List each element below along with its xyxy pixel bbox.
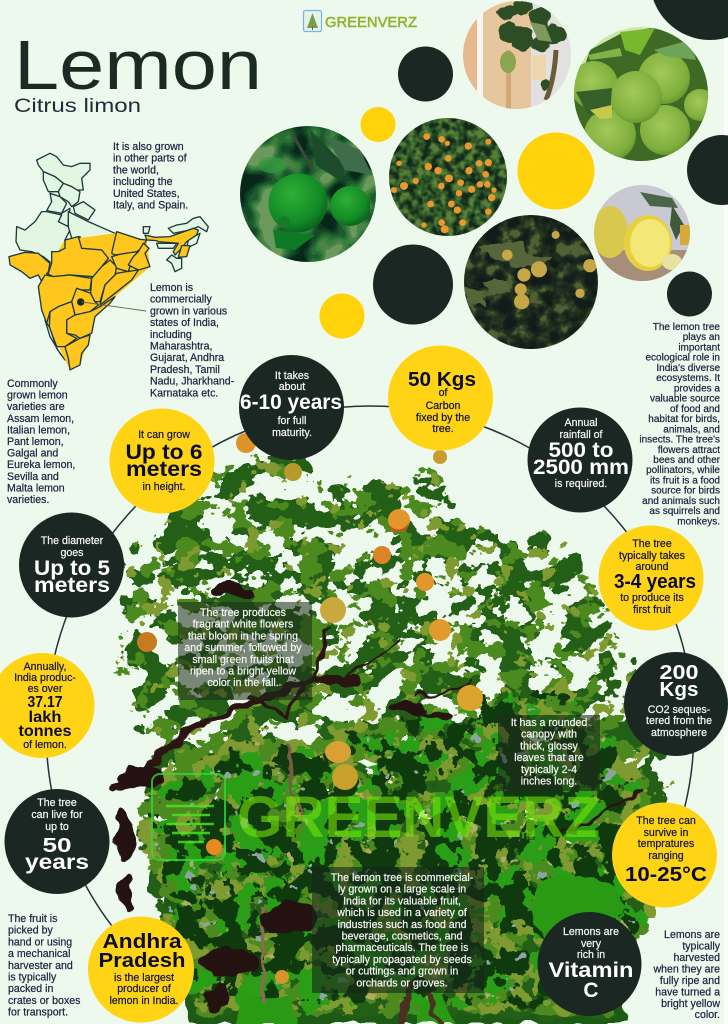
fact: rainfall: is required. bbox=[555, 478, 607, 490]
fact: temperature range: The tree can bbox=[636, 815, 696, 827]
fact: maturity: maturity. bbox=[272, 427, 312, 439]
panel: canopy note: inches long. bbox=[521, 776, 577, 788]
fact: diameter: goes bbox=[61, 547, 83, 559]
fact: annual production: of lemon. bbox=[23, 739, 67, 751]
text: ecological role: India's diverse bbox=[656, 363, 720, 374]
fact: CO2 sequestered: CO2 seques- bbox=[648, 704, 711, 716]
text: ecological role: valuable source bbox=[650, 394, 720, 405]
illustration: lemon tree bbox=[104, 433, 680, 1024]
fact: first fruit bbox=[598, 526, 704, 630]
photo: potted lemon plant bbox=[463, 0, 572, 110]
watermark: Greenverz: GREENVERZ bbox=[237, 785, 600, 850]
fact: carbon fixed: 50 Kgs bbox=[408, 369, 476, 391]
photo: bunch of green limes bbox=[574, 27, 708, 161]
text: ecological role: habitat for birds, bbox=[648, 414, 720, 425]
subtitle: Citrus limon bbox=[14, 95, 141, 117]
fact: carbon fixed: fixed by the bbox=[416, 412, 470, 424]
text: other parts of the world: in other parts of bbox=[113, 153, 187, 165]
fact: maturity: for full bbox=[278, 415, 306, 427]
panel: commercial cultivation note: ly grown on a large scale in bbox=[338, 884, 466, 896]
text: picking and transport: picked by bbox=[8, 925, 53, 937]
fact: height: in height. bbox=[142, 481, 186, 493]
fact: diameter bbox=[19, 512, 124, 618]
watermark: Greenverz bbox=[152, 774, 600, 860]
fact: diameter: The diameter bbox=[41, 535, 104, 547]
panel: flowers and fruit note: color in the fall. bbox=[207, 677, 279, 689]
decorative circles bbox=[320, 0, 728, 338]
fact: vitamin C bbox=[538, 912, 642, 1016]
fact: maturity: 6-10 years bbox=[240, 391, 342, 414]
text: lemon varieties: Eureka lemon, bbox=[7, 459, 75, 471]
text: commercial growing states: including bbox=[150, 329, 192, 341]
lemon-growing states bbox=[9, 228, 198, 370]
text: harvesting: harvested bbox=[673, 952, 720, 964]
fact: annual production: Annually, bbox=[24, 661, 66, 673]
text: commercial growing states: Lemon is bbox=[150, 282, 193, 294]
panel: canopy note: thick, glossy bbox=[520, 740, 579, 752]
logo: Greenverz: GREENVERZ bbox=[325, 14, 417, 31]
text: ecological role: provides a bbox=[674, 383, 720, 394]
photo: green limes on branch bbox=[240, 126, 376, 262]
text: commercial growing states: Gujarat, Andhra bbox=[150, 352, 224, 364]
fact: lifespan: can live for bbox=[31, 809, 83, 821]
text: other parts of the world: United States, bbox=[113, 188, 180, 200]
fact: rainfall bbox=[528, 408, 632, 512]
fact: vitamin C: Vitamin bbox=[548, 959, 634, 982]
text: picking and transport: a mechanical bbox=[8, 948, 70, 960]
text: ecological role: monkeys. bbox=[677, 516, 720, 527]
fact: first fruit: The tree bbox=[632, 538, 672, 550]
fact: carbon fixed bbox=[388, 346, 493, 450]
panel: flowers and fruit note: fragrant white flowers bbox=[193, 619, 293, 631]
fact: annual production bbox=[0, 653, 94, 758]
text: picking and transport: harvester and bbox=[8, 960, 73, 972]
panel: canopy note: typically 2-4 bbox=[521, 764, 577, 776]
photo: lemon slice bbox=[594, 185, 690, 281]
fact: height: Up to 6 bbox=[126, 441, 202, 464]
text: lemon varieties: grown lemon bbox=[7, 390, 68, 402]
fact: CO2 sequestered: atmosphere bbox=[651, 727, 707, 739]
panel: commercial cultivation note: beverage, cosmetics, and bbox=[342, 930, 462, 942]
panel: commercial cultivation note: industries such as food and bbox=[338, 919, 467, 931]
panel: flowers and fruit note: The tree produces bbox=[200, 607, 286, 619]
fact: first fruit: 3-4 years bbox=[614, 571, 696, 593]
text: ecological role: and animals such bbox=[642, 496, 720, 507]
panel: flowers and fruit note: small green fruits that bbox=[192, 654, 294, 666]
fact: carbon fixed: Carbon bbox=[426, 400, 460, 412]
fact: annual production: tonnes bbox=[18, 723, 72, 740]
panel: canopy note: leaves that are bbox=[514, 752, 584, 764]
fact: temperature range: ranging bbox=[648, 850, 684, 862]
text: harvesting: when they are bbox=[652, 964, 720, 976]
text: lemon varieties: Sevilla and bbox=[7, 471, 59, 483]
photo: lemons in dark foliage bbox=[464, 215, 598, 349]
map pointer bbox=[77, 298, 146, 311]
text: ecological role: plays an bbox=[683, 332, 720, 343]
fact: rainfall: 500 to bbox=[548, 439, 614, 462]
fact: first fruit: to produce its bbox=[620, 592, 684, 604]
text: lemon varieties: Pant lemon, bbox=[7, 436, 64, 448]
text: harvesting: color. bbox=[695, 1009, 720, 1021]
solid lower canopy bbox=[160, 840, 627, 1024]
dark trunk masses bbox=[115, 583, 430, 1011]
panel: canopy note: canopy with bbox=[521, 729, 577, 741]
text: lemon varieties: Commonly bbox=[7, 378, 58, 390]
fact: first fruit: around bbox=[636, 561, 669, 573]
text: harvesting: typically bbox=[682, 940, 721, 952]
fact: largest producer: lemon in India. bbox=[110, 995, 178, 1007]
fact: lifespan: The tree bbox=[37, 797, 77, 809]
panel: commercial cultivation note: which is used in a variety of bbox=[336, 907, 467, 919]
text: ecological role: The lemon tree bbox=[653, 322, 720, 333]
fact: CO2 sequestered: tered from the bbox=[646, 715, 712, 727]
foliage colour layers bbox=[104, 440, 680, 1024]
northern and other non-growing states bbox=[16, 153, 208, 360]
title: Lemon bbox=[14, 26, 262, 104]
fact: carbon fixed: of bbox=[439, 387, 447, 399]
fact: lifespan: 50 bbox=[42, 835, 72, 857]
panel: flowers and fruit note: ripen to a bright yellow bbox=[190, 666, 296, 678]
fact: largest producer: Andhra bbox=[102, 931, 182, 953]
panel: flowers and fruit note: and summer, followed by bbox=[184, 642, 302, 654]
fact: largest producer: is the largest bbox=[114, 972, 174, 984]
fact: vitamin C: C bbox=[583, 979, 599, 1002]
text: ecological role: flowers attract bbox=[658, 445, 720, 456]
text: other parts of the world: the world, bbox=[113, 164, 159, 176]
text: commercial growing states: grown in various bbox=[150, 305, 227, 317]
panel: canopy note: It has a rounded bbox=[511, 717, 587, 729]
fact: rainfall: 2500 mm bbox=[533, 456, 629, 479]
text: lemon varieties: Malta lemon bbox=[7, 482, 65, 494]
fact: lifespan: years bbox=[25, 851, 89, 874]
text: other parts of the world: Italy, and Spain. bbox=[113, 200, 188, 212]
fact: carbon fixed: tree. bbox=[432, 423, 454, 435]
fact: CO2 sequestered: Kgs bbox=[660, 679, 698, 701]
fact: temperature range bbox=[612, 802, 717, 908]
fact: diameter: Up to 5 bbox=[34, 557, 110, 580]
fact: first fruit: typically takes bbox=[619, 550, 685, 562]
text: lemon varieties: varieties are bbox=[7, 401, 65, 413]
fact: temperature range: survive in bbox=[644, 827, 688, 839]
fact: maturity: about bbox=[279, 381, 305, 393]
branches bbox=[115, 627, 640, 1024]
peninsula underlay bbox=[38, 233, 150, 370]
panel: commercial cultivation note: or cuttings and grown in bbox=[346, 966, 458, 978]
text: harvesting: fully ripe and bbox=[660, 975, 720, 987]
text: ecological role: bees and other bbox=[653, 455, 721, 466]
text: ecological role: animals, and bbox=[663, 424, 720, 435]
text: harvesting: bright yellow bbox=[661, 998, 720, 1010]
panel: flowers and fruit note: that bloom in the spring bbox=[188, 630, 298, 642]
text: other parts of the world: including the bbox=[113, 176, 173, 188]
fact: annual production: 37.17 bbox=[28, 694, 63, 711]
photo: orange-fruited tree bbox=[389, 118, 507, 236]
fact: temperature range: tempratures bbox=[638, 838, 694, 850]
text: commercial growing states: Karnataka etc. bbox=[150, 387, 218, 399]
fact: annual production: es over bbox=[28, 683, 63, 695]
bright green leaves bbox=[235, 875, 625, 1024]
fact: vitamin C: rich in bbox=[577, 949, 605, 961]
panel: commercial cultivation note: India for its valuable fruit, bbox=[343, 895, 461, 907]
fact: largest producer: producer of bbox=[117, 983, 171, 995]
text: harvesting: Lemons are bbox=[664, 929, 720, 941]
text: commercial growing states: states of India, bbox=[150, 317, 219, 329]
fact: rainfall: Annual bbox=[564, 417, 598, 429]
fact: largest producer: Pradesh bbox=[98, 950, 186, 972]
text: ecological role: as squirrels and bbox=[649, 506, 720, 517]
text: commercial growing states: Maharashtra, bbox=[150, 340, 212, 352]
fact: vitamin C: very bbox=[581, 938, 602, 950]
text: ecological role: its fruit is a food bbox=[650, 476, 720, 486]
panel: commercial cultivation note bbox=[312, 867, 484, 993]
fact: lifespan bbox=[4, 789, 110, 894]
text: picking and transport: hand or using bbox=[8, 936, 72, 948]
map of India with lemon-growing states bbox=[9, 153, 208, 370]
text: lemon varieties: Italian lemon, bbox=[7, 424, 70, 436]
text: ecological role: important bbox=[678, 342, 720, 354]
logo: Greenverz bbox=[304, 10, 417, 32]
fact: lifespan: up to bbox=[45, 821, 69, 833]
fact: annual production: lakh bbox=[28, 709, 62, 726]
panel: commercial cultivation note: The lemon tree is commercial- bbox=[331, 872, 474, 884]
text: harvesting: have turned a bbox=[655, 986, 720, 998]
fact: first fruit: first fruit bbox=[633, 604, 671, 616]
fact: vitamin C: Lemons are bbox=[563, 926, 619, 938]
panel: commercial cultivation note: pharmaceuticals. The tree is bbox=[336, 942, 468, 954]
fact: height: It can grow bbox=[138, 429, 190, 441]
text: picking and transport: The fruit is bbox=[8, 913, 57, 925]
fact: CO2 sequestered bbox=[624, 652, 728, 756]
fact: largest producer bbox=[88, 916, 194, 1022]
lemon fruits bbox=[137, 433, 483, 984]
text: other parts of the world: It is also grown bbox=[113, 141, 184, 153]
text: picking and transport: for transport. bbox=[8, 1007, 68, 1019]
text: picking and transport: packed in bbox=[8, 983, 53, 995]
text: ecological role: source for birds bbox=[651, 486, 720, 497]
text: picking and transport: crates or boxes bbox=[8, 995, 80, 1007]
fact: maturity: It takes bbox=[275, 370, 309, 382]
text: lemon varieties: varieties. bbox=[7, 494, 49, 506]
panel: canopy note bbox=[498, 715, 600, 791]
panel: commercial cultivation note: typically propagated by seeds bbox=[332, 954, 472, 966]
fact: annual production: India produc- bbox=[14, 672, 76, 684]
fact: CO2 sequestered: 200 bbox=[660, 662, 698, 684]
text: ecological role: ecosystems. It bbox=[656, 373, 720, 384]
fact: maturity bbox=[239, 355, 344, 460]
text: commercial growing states: Pradesh, Tamil bbox=[150, 364, 220, 376]
panel: flowers and fruit note bbox=[178, 602, 312, 700]
text: ecological role: insects. The tree's bbox=[639, 434, 720, 446]
text: ecological role: of food and bbox=[670, 404, 720, 415]
text: ecological role: ecological role in bbox=[646, 353, 720, 364]
text: lemon varieties: Assam lemon, bbox=[7, 413, 74, 425]
ring connecting fact circles bbox=[46, 406, 694, 1024]
fact: temperature range: 10-25°C bbox=[625, 864, 707, 886]
text: picking and transport: is typically bbox=[8, 972, 57, 984]
fact: height: meters bbox=[126, 458, 202, 481]
fact: height bbox=[110, 408, 214, 514]
panel: commercial cultivation note: orchards or groves. bbox=[356, 977, 448, 989]
fact: rainfall: rainfall of bbox=[560, 429, 603, 441]
text: commercial growing states: Nadu, Jharkhand- bbox=[150, 376, 235, 388]
fact: diameter: meters bbox=[34, 574, 110, 597]
text: ecological role: pollinators, while bbox=[646, 465, 720, 476]
text: lemon varieties: Galgal and bbox=[7, 448, 58, 460]
text: commercial growing states: commercially bbox=[150, 294, 213, 306]
